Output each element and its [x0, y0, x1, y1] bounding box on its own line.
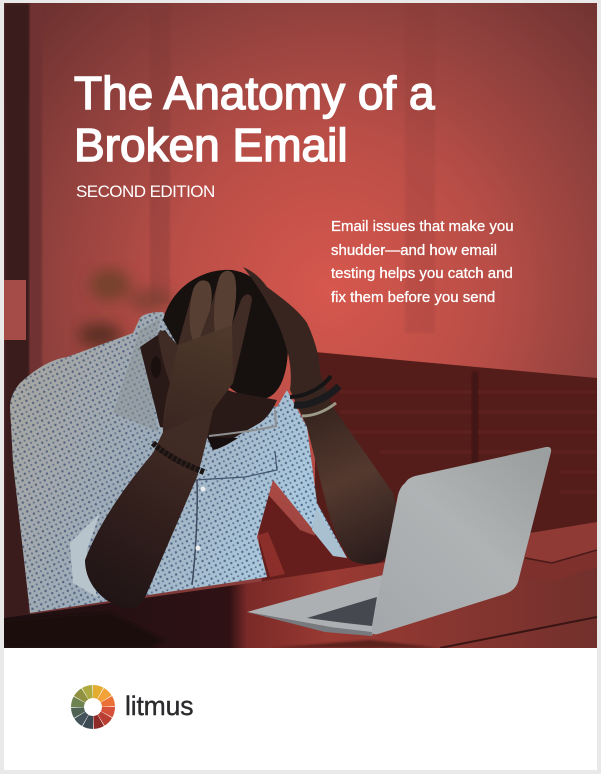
- title: The Anatomy of a: [74, 67, 435, 119]
- intro text: testing helps you catch and: [331, 265, 513, 282]
- laptop: [247, 447, 551, 636]
- litmus logo: [71, 685, 193, 729]
- man: glasses: [209, 410, 276, 436]
- logo wordmark: litmus: [125, 691, 193, 721]
- bracelets: [153, 376, 339, 472]
- man: near arm and hand: [85, 271, 252, 608]
- table: [4, 536, 597, 648]
- title: Broken Email: [74, 119, 348, 171]
- intro text: shudder—and how email: [331, 242, 497, 258]
- radiator cabinet: [255, 352, 597, 600]
- intro text: Email issues that make you: [331, 218, 514, 235]
- man: head: [140, 270, 288, 450]
- man: shirt: [10, 312, 347, 613]
- title: [74, 67, 436, 171]
- man: far arm and hand: [243, 267, 397, 564]
- subtitle: second edition: SECOND EDITION: [76, 182, 215, 201]
- intro text: [331, 218, 514, 306]
- blurred plant: [78, 269, 172, 347]
- book: [525, 522, 597, 576]
- icon: litmus colour wheel: [71, 685, 115, 729]
- intro text: fix them before you send: [331, 288, 495, 306]
